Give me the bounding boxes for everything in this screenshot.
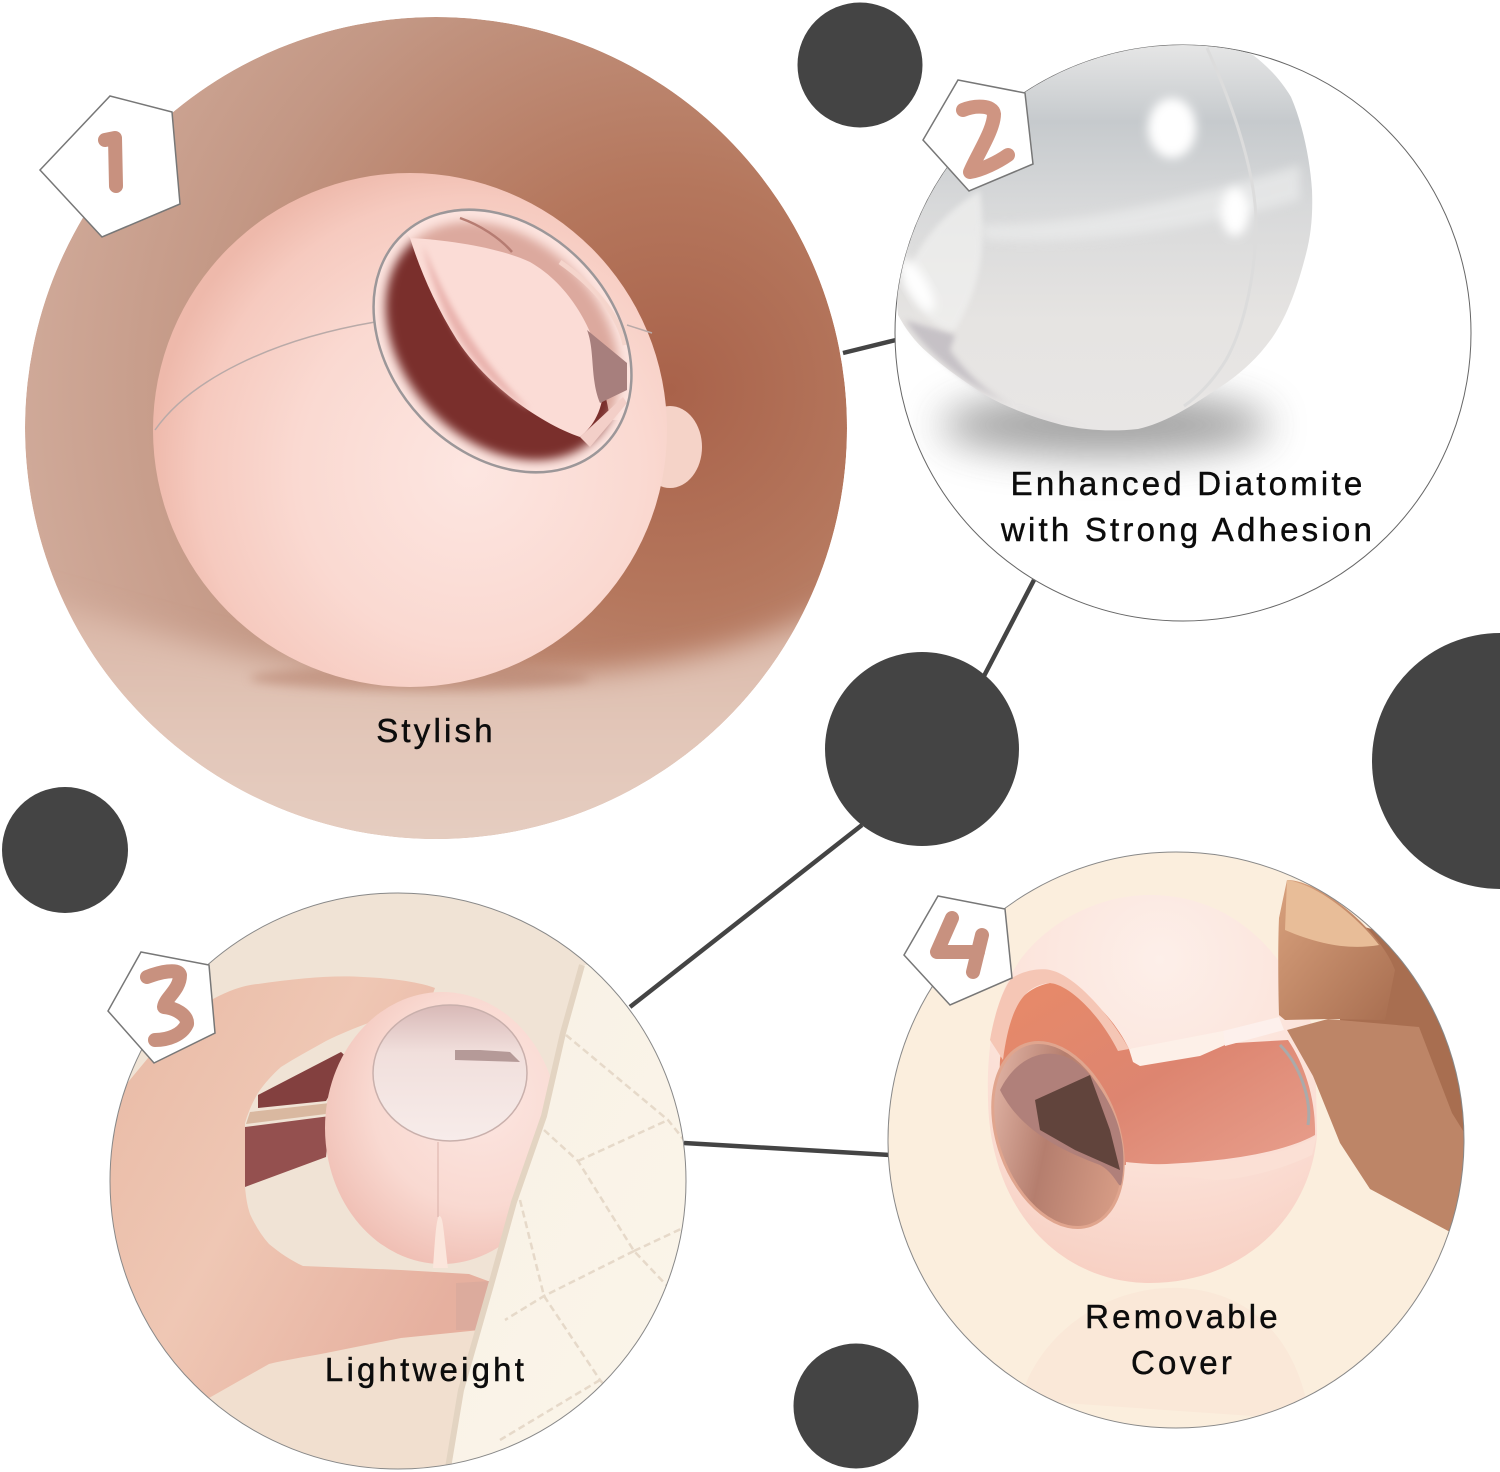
gel inner lobe bbox=[915, 192, 982, 328]
panel 1: stylish bbox=[0, 17, 860, 870]
label: Enhanced Diatomite: Enhanced Diatomite bbox=[1011, 465, 1365, 502]
panel 4: removable cover bbox=[888, 852, 1480, 1428]
ball seam bbox=[155, 322, 652, 430]
label: Lightweight: Lightweight bbox=[325, 1351, 527, 1388]
thread bbox=[438, 1142, 439, 1217]
ball shadow bbox=[250, 666, 590, 690]
panel 2: diatomite bbox=[893, 44, 1471, 621]
panel 4 outline bbox=[888, 852, 1464, 1428]
panel 3 outline bbox=[110, 893, 686, 1469]
hand bbox=[100, 976, 488, 1398]
badge 2 bbox=[923, 80, 1033, 191]
cavity interior bbox=[1000, 983, 1315, 1170]
cavity rim bbox=[990, 969, 1129, 1060]
gel rim shading bbox=[906, 320, 997, 398]
label: Stylish: Stylish bbox=[376, 712, 496, 749]
pull strip bbox=[1129, 1031, 1225, 1066]
pink ball bbox=[153, 173, 667, 687]
lower finger bbox=[1287, 1019, 1475, 1240]
badge 4 bbox=[904, 896, 1012, 1005]
dark dot: middle bbox=[825, 652, 1019, 846]
gel band bbox=[980, 165, 1300, 241]
panel 3 background bbox=[128, 894, 588, 1281]
beige strip bbox=[246, 1103, 330, 1124]
panel 1 background bbox=[25, 17, 847, 839]
upper finger bbox=[1278, 880, 1395, 1020]
thumb nail bbox=[456, 1281, 490, 1330]
dark dot: top centre bbox=[798, 2, 922, 128]
quilted bag bbox=[446, 965, 700, 1472]
badge 1 bbox=[40, 96, 180, 237]
panel 3: lightweight bbox=[100, 893, 700, 1472]
label: Removable: Removable bbox=[1085, 1298, 1281, 1335]
panel 2 outline bbox=[895, 45, 1471, 621]
connector lines bbox=[630, 340, 1034, 1155]
pull tab bbox=[433, 1216, 448, 1268]
pink ball bbox=[325, 992, 559, 1264]
faint reflection bbox=[1020, 1288, 1310, 1420]
chrome edge bbox=[1280, 1045, 1309, 1125]
dark dot: left bbox=[2, 787, 128, 913]
nail bbox=[1285, 880, 1379, 947]
gel seam bbox=[1184, 48, 1256, 406]
panel 4 background bbox=[888, 852, 1464, 1428]
mirror lens bbox=[372, 208, 633, 474]
gel ball bbox=[897, 44, 1312, 430]
gel shadow bbox=[940, 393, 1270, 457]
chrome roller bbox=[991, 1041, 1125, 1229]
label: with Strong Adhesion: with Strong Adhesion bbox=[1000, 511, 1375, 548]
ball tab bbox=[660, 406, 702, 488]
panel 1 floor bbox=[62, 598, 808, 839]
hand back bbox=[1340, 928, 1464, 1132]
pull tab bbox=[1223, 1017, 1284, 1046]
label: Cover: Cover bbox=[1131, 1344, 1235, 1381]
ball body bbox=[988, 895, 1317, 1283]
lower shell lip bbox=[1126, 1162, 1160, 1165]
gel highlights bbox=[1148, 98, 1196, 158]
lens reflection bbox=[455, 1050, 520, 1062]
dark fingers bbox=[258, 1052, 350, 1108]
dark dot: right edge bbox=[1372, 633, 1500, 889]
lower background bbox=[200, 1300, 490, 1472]
lens bbox=[373, 1005, 527, 1141]
dark dot: bottom bbox=[794, 1344, 918, 1468]
badge 3 bbox=[108, 952, 215, 1063]
